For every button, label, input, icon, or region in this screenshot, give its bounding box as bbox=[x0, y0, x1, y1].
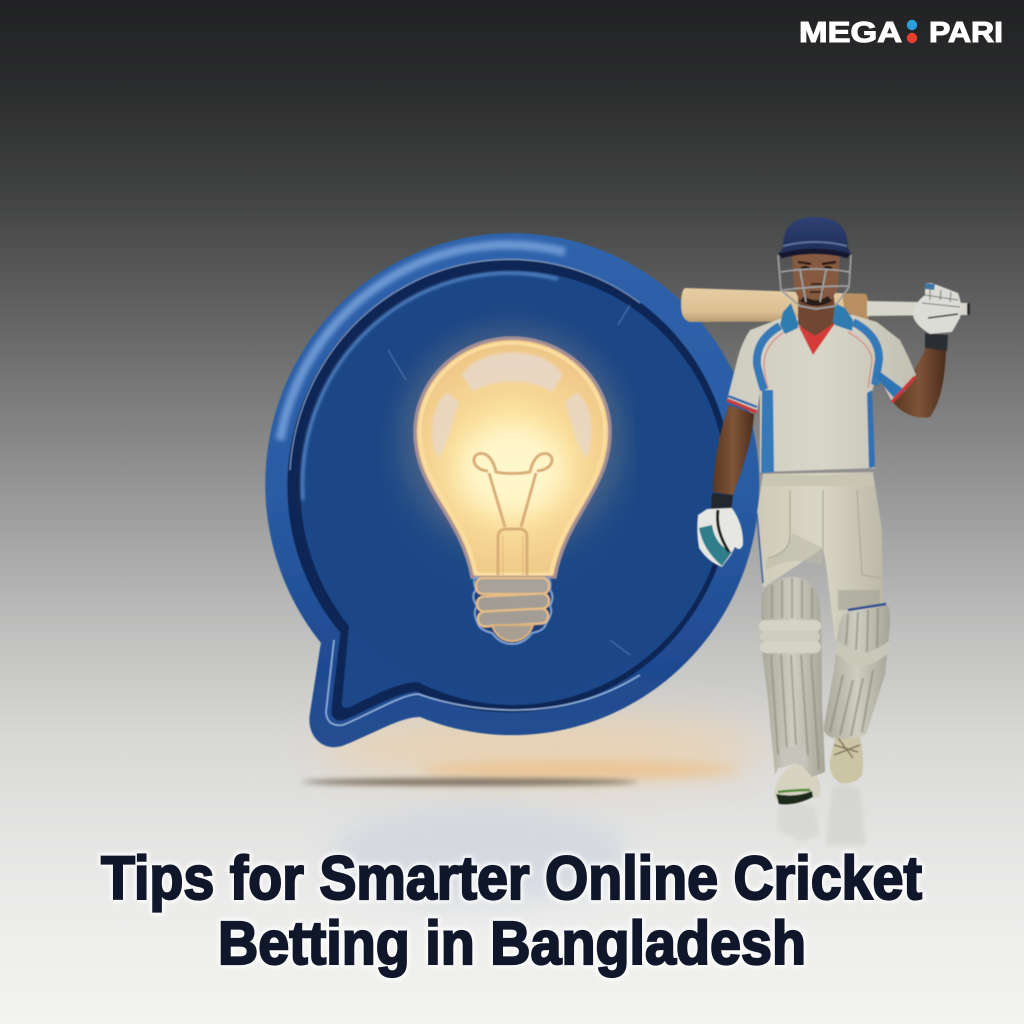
title halo: Tips for Smarter Online Cricket bbox=[101, 844, 922, 912]
collar bbox=[780, 303, 853, 334]
title: Betting in Bangladesh bbox=[218, 909, 806, 977]
helmet bbox=[778, 217, 851, 258]
neck bbox=[798, 296, 836, 338]
bubble scratches bbox=[388, 305, 630, 655]
left leg pad bbox=[759, 577, 825, 777]
bulb glass bbox=[415, 338, 610, 577]
logo word MEGA: MEGA bbox=[799, 17, 902, 49]
rim highlight bbox=[280, 245, 565, 440]
bat bbox=[681, 288, 970, 322]
bubble face bbox=[300, 271, 726, 708]
right leg pad bbox=[824, 604, 890, 739]
speech bubble bbox=[265, 233, 759, 747]
left shoe bbox=[774, 764, 821, 804]
bulb screw base bbox=[473, 578, 552, 644]
helmet grille bbox=[778, 255, 851, 309]
logo red dot bbox=[907, 33, 917, 43]
logo word PARI: PARI bbox=[929, 17, 1003, 49]
wristband bbox=[925, 333, 948, 351]
batting glove lower bbox=[697, 508, 743, 567]
bulb glow bbox=[400, 328, 624, 552]
bottom rim highlight bbox=[326, 640, 640, 725]
title: Tips for Smarter Online Cricket bbox=[101, 844, 922, 912]
sleeve cuffs bbox=[875, 371, 906, 398]
filament bbox=[474, 453, 552, 575]
bubble groove bbox=[290, 262, 730, 718]
shoe reflections bbox=[778, 784, 866, 845]
wristband lower bbox=[711, 493, 733, 510]
bubble outer rim bbox=[265, 233, 759, 747]
red placket bbox=[798, 322, 836, 355]
logo blue dot bbox=[907, 20, 917, 30]
face bbox=[792, 252, 840, 308]
light bulb bbox=[400, 328, 624, 644]
raised arm bbox=[893, 348, 946, 418]
title halo: Betting in Bangladesh bbox=[218, 909, 806, 977]
groove highlight line bbox=[290, 259, 640, 470]
title halo bbox=[101, 844, 922, 977]
right shoe bbox=[830, 735, 863, 783]
trousers bbox=[757, 472, 883, 640]
face edge highlight bbox=[302, 273, 558, 500]
brand logo bbox=[799, 17, 1003, 49]
floor glow and shadow bbox=[302, 718, 765, 905]
shirt bbox=[727, 315, 916, 473]
filament glow bbox=[458, 424, 566, 516]
bulb highlights bbox=[462, 352, 563, 392]
cricket player bbox=[681, 217, 970, 804]
batting glove top bbox=[913, 283, 961, 334]
eyes bbox=[798, 262, 836, 264]
title bbox=[101, 844, 922, 977]
shirt blue panels bbox=[757, 326, 780, 390]
lower arm bbox=[713, 405, 754, 495]
